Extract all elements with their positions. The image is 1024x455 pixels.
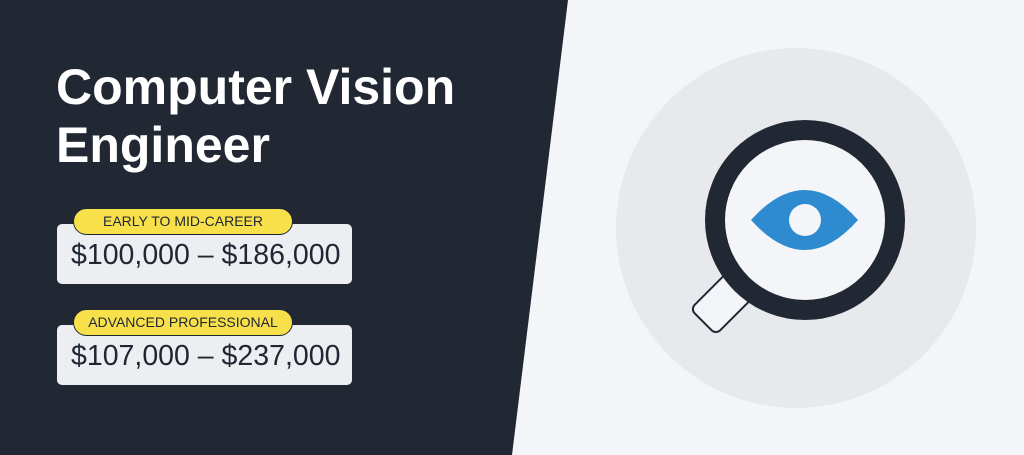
salary box: early to mid-career bbox=[57, 224, 352, 284]
salary box: early to mid-career: $100,000 – $186,000 bbox=[71, 239, 340, 271]
title: Computer Vision bbox=[56, 59, 455, 115]
label pill: early to mid-career: EARLY TO MID-CAREER bbox=[103, 213, 263, 229]
label pill: advanced professional bbox=[73, 309, 293, 336]
salary box: advanced professional bbox=[57, 325, 352, 385]
title: Engineer bbox=[56, 117, 270, 173]
label pill: early to mid-career bbox=[73, 208, 293, 235]
salary box: advanced professional: $107,000 – $237,000 bbox=[71, 340, 340, 372]
label pill: advanced professional: ADVANCED PROFESSIONAL bbox=[88, 314, 278, 330]
title bbox=[56, 59, 455, 173]
